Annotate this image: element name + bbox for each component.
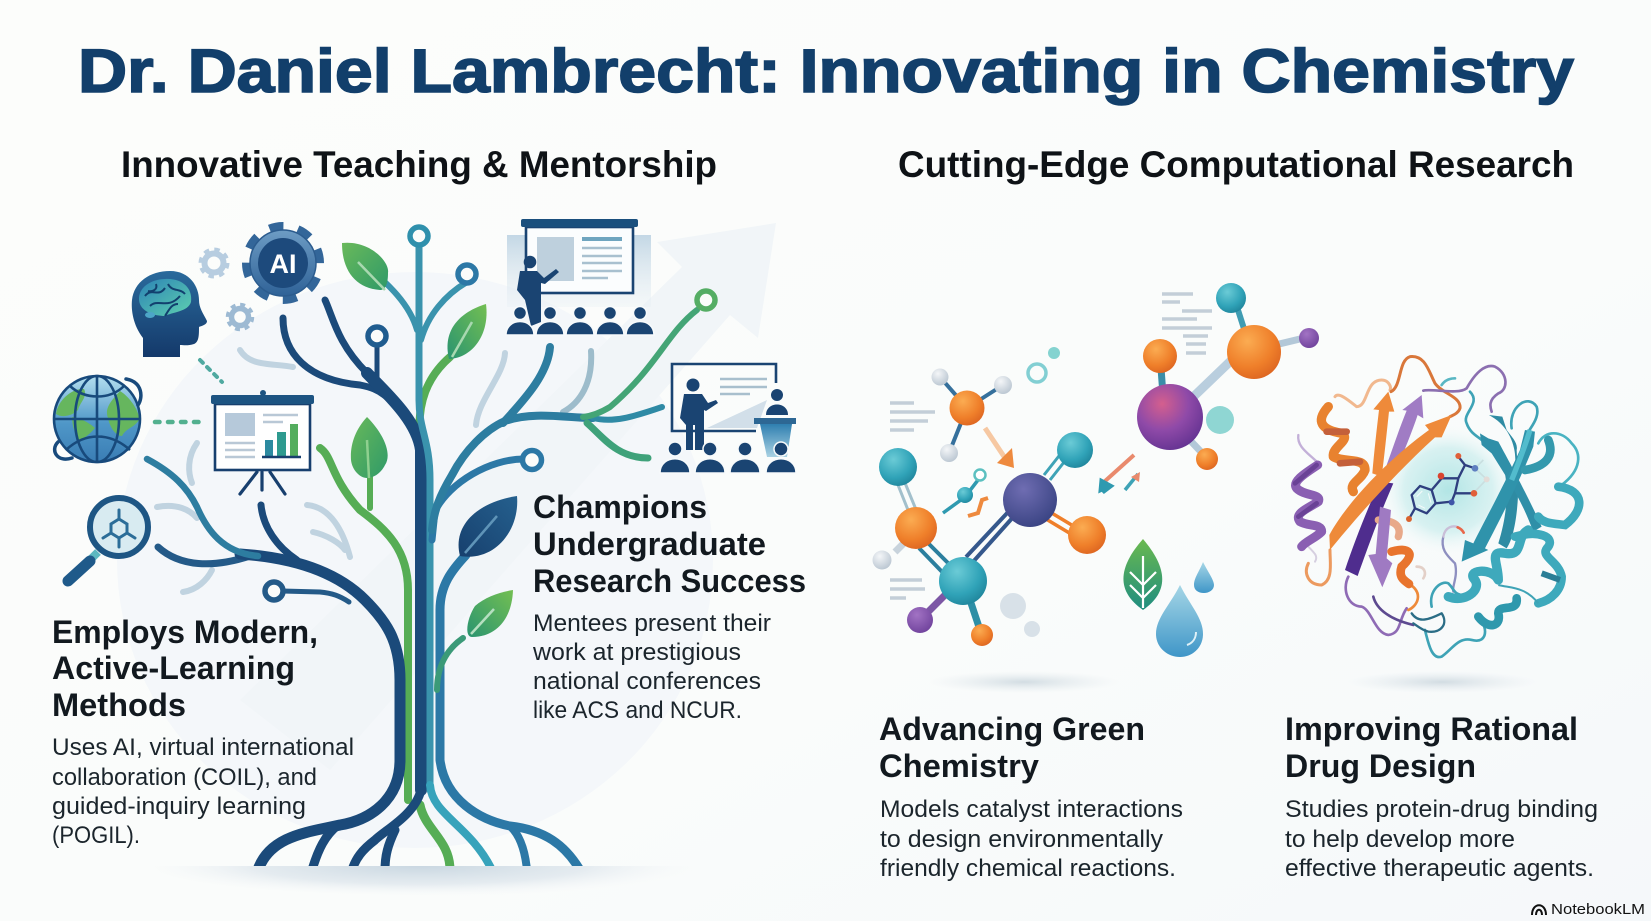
- small water molecule: [932, 368, 1012, 462]
- text block: undergraduate research: Research Success: [533, 563, 806, 599]
- text block: active learning: collaboration (COIL), and: [52, 764, 317, 791]
- text block: green chemistry: Chemistry: [879, 748, 1039, 784]
- pale annotation lines: [890, 294, 1212, 598]
- text block: active learning: Active-Learning: [52, 650, 295, 686]
- chart: growth tree: [147, 227, 715, 870]
- text block: drug design: Drug Design: [1285, 748, 1476, 784]
- watermark: NotebookLM: NotebookLM: [1551, 901, 1645, 918]
- text block: green chemistry: to design environmentally: [880, 826, 1164, 853]
- text block: active learning: Methods: [52, 687, 186, 723]
- text block: undergraduate research: Champions: [533, 489, 707, 525]
- tree: teal centre strands: [385, 247, 494, 866]
- thin loops: [1306, 357, 1578, 657]
- heading: left section: Innovative Teaching & Mentorship: [121, 144, 717, 185]
- icon: water drops: [1156, 562, 1214, 657]
- pale circles: [1000, 593, 1040, 637]
- tree: connector nodes: [265, 227, 715, 600]
- text block: drug design: to help develop more: [1285, 826, 1515, 853]
- icon: AI gear: [237, 217, 329, 309]
- title: Dr. Daniel Lambrecht: Innovating in Chemistry: [78, 37, 1574, 105]
- icon: head with brain: [132, 271, 207, 357]
- shadow: protein: [1347, 671, 1537, 693]
- text block: undergraduate research: like ACS and NCUR.: [533, 697, 742, 724]
- tree: right blue branches: [432, 347, 662, 870]
- icon: classroom presentation top: [506, 219, 654, 335]
- orange helix: [1321, 407, 1365, 492]
- text block: undergraduate research: work at prestigious: [532, 639, 741, 666]
- icon: small pale gear: [202, 250, 226, 276]
- binding pocket glow: [1380, 425, 1517, 555]
- text block: drug design: Improving Rational: [1285, 711, 1578, 747]
- text block: active learning: [52, 614, 354, 849]
- background: pale circle and growth arrow: [117, 223, 776, 848]
- text block: active learning: (POGIL).: [52, 822, 140, 849]
- text block: undergraduate research: Mentees present their: [533, 610, 771, 637]
- small arrows: [1100, 455, 1140, 492]
- text block: drug design: effective therapeutic agents.: [1285, 855, 1594, 882]
- teal sheet and helices: [1448, 415, 1579, 625]
- strand arrows: [1329, 392, 1452, 587]
- illustration: protein-drug binding: [1295, 357, 1579, 657]
- tree: left blue branch: [147, 459, 258, 556]
- text block: undergraduate research: national conferences: [533, 668, 761, 695]
- tree: faint branches: [157, 350, 591, 592]
- connector: dashes from head: [200, 360, 222, 382]
- icon: small blue gear: [228, 306, 252, 328]
- icon: classroom presentation right: [660, 364, 796, 473]
- connector: dashes from globe: [155, 420, 200, 424]
- upper molecule: [1137, 283, 1319, 470]
- tree: green right strands: [437, 310, 697, 690]
- text block: green chemistry: [879, 711, 1183, 882]
- icon: presentation board with bar chart: [211, 390, 314, 494]
- icon: magnifier with molecule: [68, 498, 148, 581]
- icon: AI gear: AI: [270, 249, 296, 279]
- large catalyst molecule: [872, 432, 1106, 646]
- icon: globe: [54, 376, 141, 462]
- tree: leaves: [342, 243, 517, 637]
- small fragment: [943, 470, 988, 516]
- illustration: green chemistry molecules: [872, 283, 1319, 646]
- shadow: molecules: [929, 671, 1119, 693]
- tree: navy strands: [158, 300, 421, 870]
- text block: green chemistry: Advancing Green: [879, 711, 1145, 747]
- tree: green strands: [320, 357, 450, 870]
- ring and dot: [1028, 347, 1060, 382]
- purple helix: [1295, 435, 1322, 547]
- text block: undergraduate research: [532, 489, 806, 724]
- text block: active learning: Employs Modern,: [52, 614, 318, 650]
- heading: right section: Cutting-Edge Computational Research: [898, 144, 1574, 185]
- text block: green chemistry: friendly chemical reactions.: [880, 855, 1176, 882]
- icon: green leaf: [1123, 539, 1162, 610]
- drug ligand: [1406, 453, 1490, 522]
- ground shadow: [205, 866, 632, 890]
- reaction arrow: [985, 428, 1014, 468]
- text block: undergraduate research: Undergraduate: [533, 526, 766, 562]
- text block: active learning: guided-inquiry learning: [52, 793, 306, 820]
- text block: green chemistry: Models catalyst interactions: [880, 796, 1183, 823]
- text block: active learning: Uses AI, virtual international: [52, 734, 354, 761]
- text block: drug design: Studies protein-drug binding: [1285, 796, 1598, 823]
- text block: drug design: [1285, 711, 1598, 882]
